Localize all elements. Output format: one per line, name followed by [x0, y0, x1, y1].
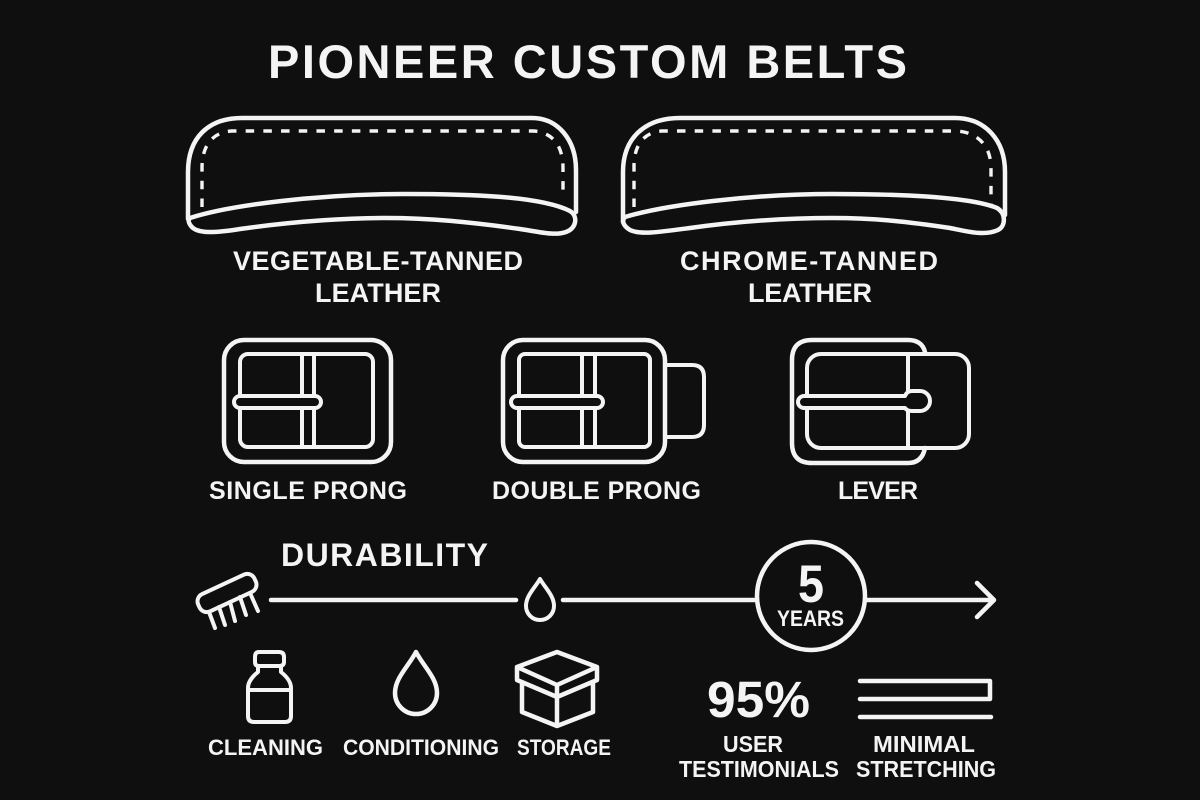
- label: chrome-tanned leather: LEATHER: [748, 278, 872, 308]
- label: minimal stretching: STRETCHING: [856, 756, 996, 782]
- panel: cleaning: [208, 652, 323, 760]
- panel: chrome-tanned leather: [623, 118, 1005, 308]
- timeline line segment: [271, 598, 516, 602]
- icon: drop: [395, 652, 437, 714]
- label: double prong: DOUBLE PRONG: [492, 477, 701, 505]
- timeline line segment with arrow: [563, 583, 994, 617]
- panel: double prong buckle: [492, 340, 704, 505]
- panel: storage: [517, 652, 611, 760]
- label: vegetable-tanned leather: LEATHER: [315, 278, 441, 308]
- icon: brush: [195, 571, 259, 628]
- panel: conditioning: [343, 652, 499, 760]
- icon: box: [517, 652, 597, 726]
- icon: bottle: [248, 652, 291, 722]
- icon: small drop: [526, 579, 554, 620]
- label: user testimonials: [679, 731, 839, 782]
- icon: single prong buckle: [224, 340, 391, 462]
- label: vegetable-tanned leather: VEGETABLE-TANNED: [233, 246, 523, 276]
- icon: vegetable-tanned belt strap: [188, 118, 576, 234]
- stat: 95% user testimonials: [679, 671, 839, 782]
- label: single prong: SINGLE PRONG: [209, 477, 407, 505]
- label: storage: STORAGE: [517, 735, 611, 760]
- icon: chrome-tanned belt strap: [623, 118, 1005, 233]
- icon: double prong buckle: [503, 340, 704, 462]
- label: minimal stretching: MINIMAL: [873, 731, 975, 757]
- panel: vegetable-tanned leather: [188, 118, 576, 308]
- milestone: 5 years: YEARS: [777, 606, 844, 631]
- label: chrome-tanned leather: CHROME-TANNED: [680, 246, 938, 276]
- label: chrome-tanned leather: [680, 246, 938, 308]
- label: minimal stretching: [856, 731, 996, 782]
- stat: minimal stretching: [856, 681, 996, 782]
- panel: lever buckle: [792, 340, 969, 505]
- panel: single prong buckle: [209, 340, 407, 505]
- milestone: 5 years: 5: [798, 555, 824, 614]
- label: lever: LEVER: [838, 477, 918, 505]
- label: conditioning: CONDITIONING: [343, 735, 499, 760]
- icon: lever buckle: [792, 340, 969, 463]
- heading: durability: DURABILITY: [281, 537, 488, 573]
- value: 95%: 95%: [707, 671, 810, 728]
- label: cleaning: CLEANING: [208, 735, 323, 760]
- label: user testimonials: TESTIMONIALS: [679, 756, 839, 782]
- label: vegetable-tanned leather: [233, 246, 523, 308]
- chart: durability timeline: [195, 542, 994, 650]
- title: PIONEER CUSTOM BELTS: [268, 35, 907, 88]
- label: user testimonials: USER: [723, 731, 783, 757]
- icon: stretch lines: [860, 681, 991, 717]
- milestone: 5 years: [757, 542, 865, 650]
